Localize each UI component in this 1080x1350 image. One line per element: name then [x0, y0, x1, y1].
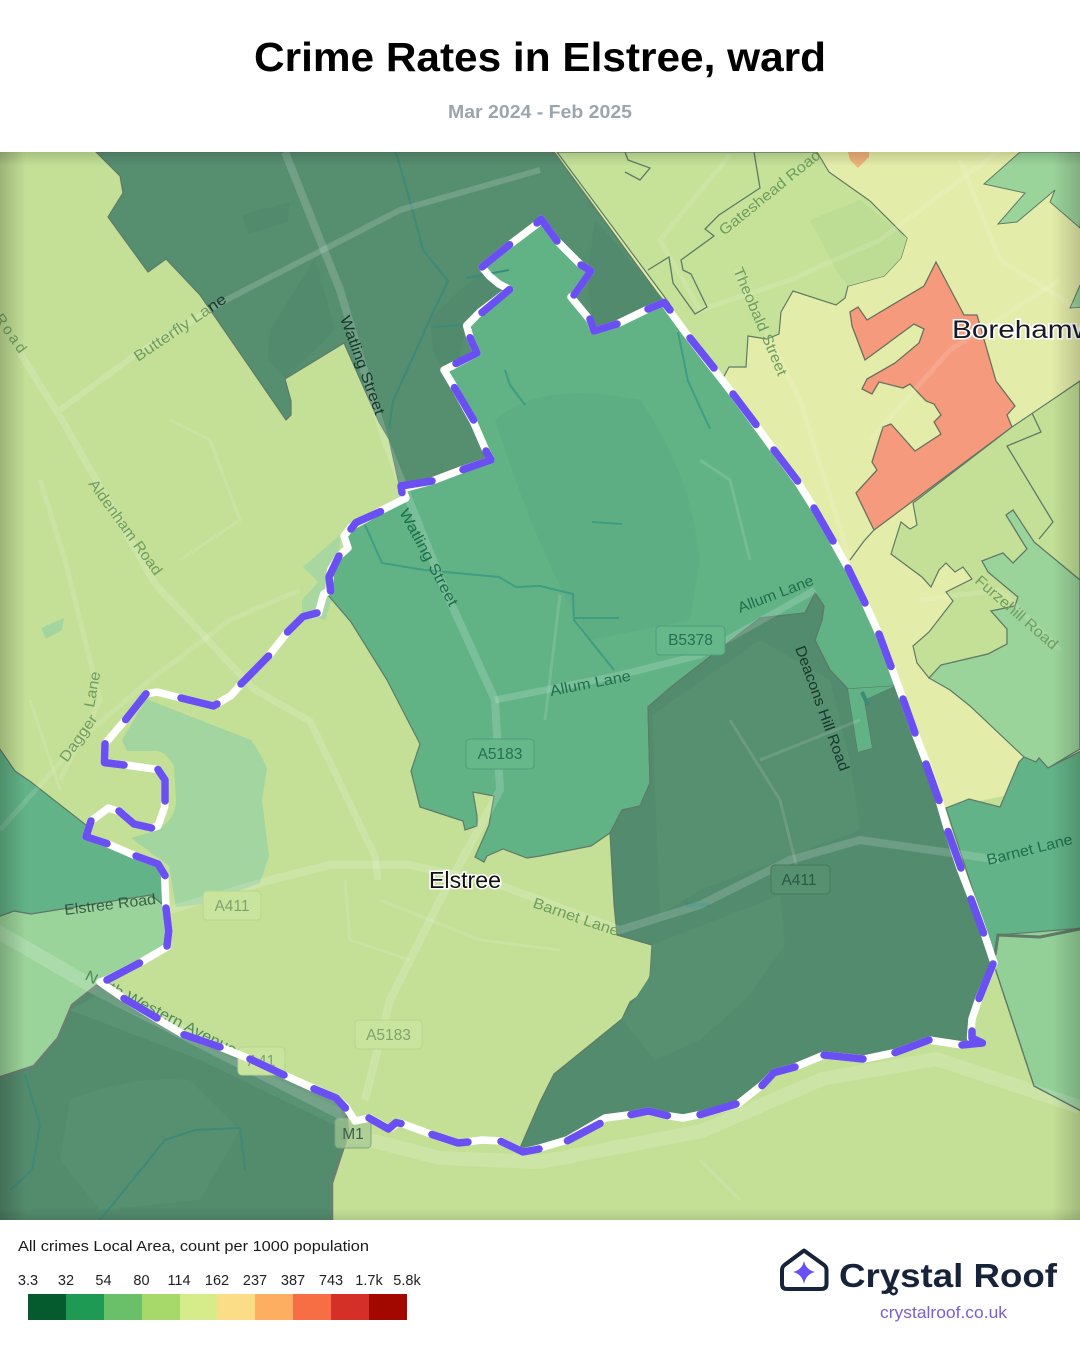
shield: A5183 south: A5183 — [366, 1027, 411, 1044]
shield: A411 west: A411 — [214, 898, 250, 915]
shield: A411 west — [203, 891, 261, 920]
legend colour scale — [28, 1294, 407, 1320]
shield: A411 east: A411 — [781, 872, 817, 889]
label: Aldenham Road: Aldenham Road — [85, 476, 166, 579]
shield: A411 east — [771, 865, 830, 894]
area: light green west — [0, 895, 169, 1078]
ward boundary: dashed white and purple outline — [86, 219, 994, 1152]
area: lime east — [891, 381, 1080, 678]
area: dark patches north-west — [285, 284, 663, 378]
label: Allum Lane east: Allum Lane — [735, 572, 816, 617]
panel: choropleth map — [0, 147, 1080, 1225]
shield: M1 — [335, 1118, 371, 1148]
roads: major — [0, 152, 1080, 1162]
area: pale yellow east — [557, 152, 1080, 808]
area: woodland south-west lighter — [60, 1079, 240, 1210]
website link: crystalroof.co.uk — [880, 1304, 1008, 1322]
legend value labels: 80 — [133, 1273, 150, 1289]
legend title: All crimes Local Area, count per 1000 population — [18, 1239, 369, 1255]
legend value labels: 743 — [319, 1273, 343, 1289]
area: salmon high-crime zone — [850, 262, 1015, 530]
area: small lake west — [41, 618, 64, 639]
legend value labels: 1.7k — [355, 1273, 383, 1289]
map edge vignette — [0, 152, 1080, 1220]
area: small pond green — [302, 534, 341, 620]
outlines: sub-area borders north-east — [625, 152, 1080, 1113]
label: Barnet Lane west: Barnet Lane — [531, 895, 621, 940]
place label: Elstree: Elstree — [429, 867, 501, 893]
title: Crime Rates in Elstree, ward — [254, 34, 826, 80]
shield: M1: M1 — [342, 1126, 364, 1143]
shield: B5378 — [656, 626, 725, 655]
area: green east edge sliver — [1069, 284, 1080, 308]
label: Elstree Road: Elstree Road — [63, 891, 157, 919]
label: Watling Street south: Watling Street — [395, 506, 462, 610]
label: North Western Avenue: North Western Avenue — [82, 967, 240, 1059]
shield: A5183 north — [466, 739, 534, 769]
area: orange top patch — [848, 152, 869, 168]
legend value labels: 387 — [281, 1273, 305, 1289]
label: Lane: Lane — [81, 670, 104, 709]
legend value labels: 32 — [58, 1273, 74, 1289]
area: reservoir — [122, 699, 269, 907]
legend value labels: 5.8k — [393, 1273, 421, 1289]
shield: B5378: B5378 — [668, 632, 713, 649]
area: light green south-east — [994, 928, 1080, 1113]
area: lighter band south-west — [70, 1010, 72, 1011]
shield: A5183 north: A5183 — [478, 746, 522, 763]
label: Butterfly Lane: Butterfly Lane — [131, 291, 230, 365]
shield: A41: A41 — [248, 1053, 275, 1070]
area: light green east — [929, 510, 1080, 768]
area: medium green west — [0, 742, 166, 918]
legend value labels: 54 — [95, 1273, 112, 1289]
label: Watling Street north: Watling Street — [336, 314, 388, 418]
label: Deacons Hill Road: Deacons Hill Road — [791, 644, 852, 773]
label: Barnet Lane east: Barnet Lane — [985, 831, 1074, 869]
legend — [18, 1239, 421, 1320]
road edge: thick border south-east — [995, 929, 1080, 955]
logo wordmark: Crystal Roof — [839, 1257, 1058, 1294]
area: green north-east corner — [984, 152, 1080, 228]
area: lime north-east — [557, 152, 907, 380]
label: Furzehill Road: Furzehill Road — [971, 572, 1061, 653]
label: Dagger: Dagger — [56, 711, 101, 765]
subtitle: date range: Mar 2024 - Feb 2025 — [448, 101, 632, 122]
water: streams — [10, 152, 868, 1220]
icon: house with star — [782, 1250, 826, 1289]
area: green tongue with pond — [848, 686, 895, 752]
label: Theobald Street: Theobald Street — [729, 265, 791, 379]
area: dark green south-west — [0, 986, 348, 1225]
road shields — [203, 626, 830, 1148]
legend value labels: 237 — [243, 1273, 267, 1289]
place label: Borehamwood: Borehamw — [952, 316, 1080, 344]
area: dark green Deacons Hill — [520, 593, 994, 1148]
shield: A5183 south — [355, 1020, 422, 1049]
map base: lime area — [0, 152, 1080, 1220]
label: Allum Lane west: Allum Lane — [549, 668, 632, 700]
area: darker lime patch north-east — [810, 200, 907, 286]
area: lighter patch Deacons Hill — [622, 945, 652, 1020]
legend value labels: 114 — [167, 1273, 191, 1289]
legend value labels: 3.3 — [18, 1273, 38, 1289]
legend value labels — [18, 1273, 421, 1289]
shield: A41 — [238, 1047, 285, 1075]
logo: Crystal Roof — [782, 1250, 1058, 1322]
area: darker woodland within ward — [495, 393, 700, 640]
logo y tail — [890, 1288, 897, 1294]
legend value labels: 162 — [205, 1273, 229, 1289]
road labels — [0, 147, 1074, 1059]
area: medium green Barnet Lane — [946, 749, 1080, 955]
roads: minor — [0, 150, 1080, 1200]
label: Gateshead Road: Gateshead Road — [716, 147, 824, 239]
area: dark green north-west — [96, 152, 664, 489]
area: medium green ward core — [327, 219, 895, 862]
